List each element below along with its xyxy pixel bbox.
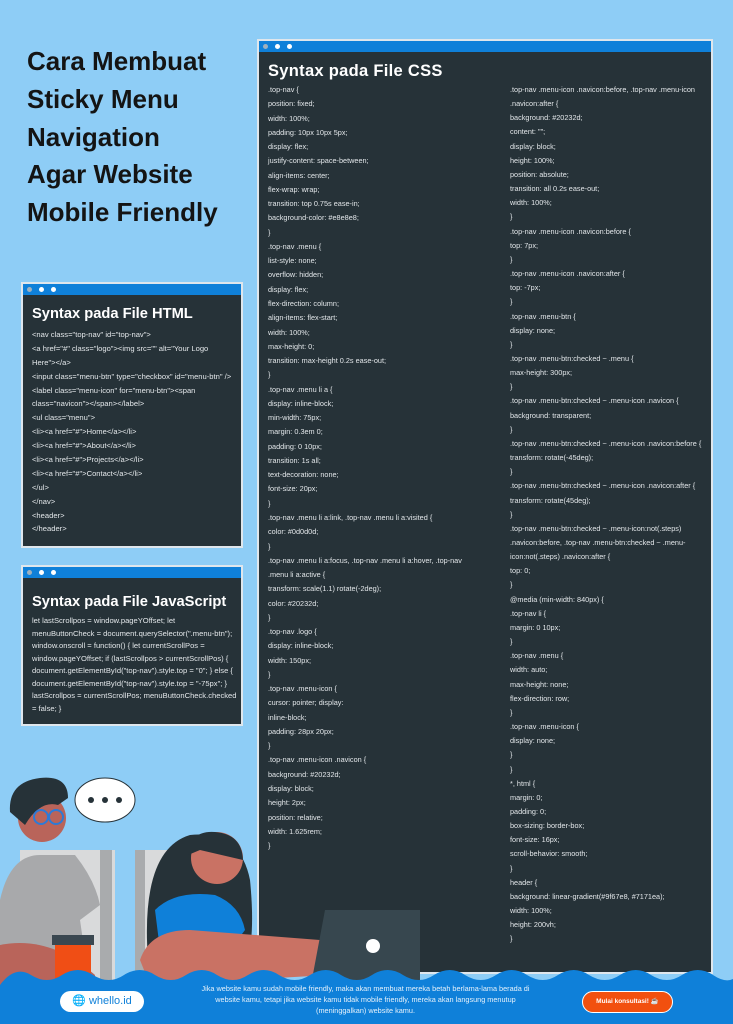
code: JavaScript: window.pageYOffset; if (lastScrollpos > currentScrollPos) {	[32, 654, 228, 662]
code: CSS right column: .navicon:before, .top-nav .menu-btn:checked ~ .menu-	[510, 538, 685, 547]
code: CSS right column: top: 7px;	[510, 241, 538, 250]
code: JavaScript: = false; }	[32, 704, 61, 712]
footer band	[0, 970, 733, 1024]
code: CSS right column: }	[510, 212, 512, 221]
panel: JavaScript	[21, 565, 243, 726]
code: CSS left column: transition: top 0.75s ease-in;	[268, 199, 360, 208]
cup	[52, 935, 94, 945]
code: CSS right column: icon:not(.steps) .navicon:after {	[510, 552, 610, 561]
code: CSS right column: .top-nav li {	[510, 609, 546, 618]
code: CSS left column: display: block;	[268, 784, 314, 793]
code: JavaScript	[32, 616, 236, 712]
code: CSS left column: display: inline-block;	[268, 399, 333, 408]
code: CSS left column: }	[268, 370, 270, 379]
code: CSS left column: align-items: center;	[268, 171, 330, 180]
code: CSS left column: max-height: 0;	[268, 342, 314, 351]
code: CSS left column: .top-nav .menu {	[268, 242, 321, 251]
code: CSS right column: margin: 0 10px;	[510, 623, 560, 632]
code: CSS left column: width: 100%;	[268, 328, 310, 337]
code: CSS right column: }	[510, 382, 512, 391]
title	[27, 46, 218, 227]
code: CSS left column: .top-nav .menu li a {	[268, 385, 332, 394]
code: CSS left column: display: flex;	[268, 285, 308, 294]
code: CSS left column: background-color: #e8e8e8;	[268, 213, 359, 222]
code: CSS right column: padding: 0;	[510, 807, 546, 816]
code: JavaScript: let lastScrollpos = window.pageYOffset; let	[32, 616, 175, 625]
code: CSS right column: .top-nav .menu-btn:checked ~ .menu-icon .navicon {	[510, 396, 679, 405]
code: CSS right column: }	[510, 467, 512, 476]
code: CSS right column: font-size: 16px;	[510, 835, 559, 844]
code: CSS right column: width: 100%;	[510, 198, 552, 207]
code: CSS left column: min-width: 75px;	[268, 413, 321, 422]
woman	[147, 835, 252, 960]
code: CSS left column: cursor: pointer; display:	[268, 698, 343, 707]
code: CSS right column: top: 0;	[510, 566, 530, 575]
man	[0, 855, 100, 990]
code: CSS left column: list-style: none;	[268, 256, 317, 265]
code: CSS right column	[510, 85, 702, 943]
code: CSS right column: height: 200vh;	[510, 920, 556, 929]
code: CSS left column: padding: 28px 20px;	[268, 727, 334, 736]
code: CSS left column: .top-nav .menu-icon .navicon {	[268, 755, 366, 764]
title: Sticky Menu	[27, 84, 179, 114]
code: HTML: <nav class="top-nav" id="top-nav">	[32, 330, 151, 339]
code: CSS right column: display: none;	[510, 736, 555, 745]
button: Mulai konsultasi: Mulai konsultasi! ☕	[596, 998, 659, 1005]
code: HTML: <ul class="menu">	[32, 413, 95, 422]
code: CSS left column: padding: 10px 10px 5px;	[268, 128, 348, 137]
code: CSS right column: .top-nav .menu-btn {	[510, 312, 576, 320]
code: CSS right column: max-height: 300px;	[510, 368, 572, 377]
title: Cara Membuat	[27, 46, 206, 76]
code: CSS right column: }	[510, 580, 512, 589]
code: CSS left column: background: #20232d;	[268, 770, 341, 779]
code: HTML: <li><a href="#">Home</a></li>	[32, 427, 136, 436]
code: CSS left column: width: 1.625rem;	[268, 827, 322, 836]
code: JavaScript: document.getElementById("top-nav").style.top = "-75px"; }	[32, 678, 227, 688]
code: CSS right column: header {	[510, 878, 537, 887]
code: HTML: <li><a href="#">Projects</a></li>	[32, 455, 144, 464]
code: CSS left column: padding: 0 10px;	[268, 442, 322, 451]
code: CSS left column: transition: 1s all;	[268, 456, 321, 465]
code: CSS left column: color: #20232d;	[268, 599, 318, 608]
code: CSS right column: }	[510, 255, 512, 264]
code: CSS left column: }	[268, 613, 270, 622]
code: CSS right column: @media (min-width: 840px) {	[510, 595, 604, 604]
code: CSS left column: overflow: hidden;	[268, 270, 323, 279]
button: Mulai konsultasi	[582, 991, 673, 1013]
speech bubble	[75, 778, 135, 822]
title: Mobile Friendly	[27, 197, 218, 227]
code: CSS right column: }	[510, 425, 512, 434]
code: CSS left column: display: flex;	[268, 142, 308, 151]
code: CSS left column: display: inline-block;	[268, 641, 333, 650]
code: CSS right column: }	[510, 340, 512, 349]
title: Navigation	[27, 122, 160, 152]
code: CSS left column: height: 2px;	[268, 798, 306, 807]
code: JavaScript: menuButtonCheck = document.querySelector(".menu-btn");	[32, 628, 232, 638]
code: CSS left column: text-decoration: none;	[268, 470, 339, 479]
code: CSS right column: }	[510, 934, 512, 943]
code: CSS left column: position: relative;	[268, 813, 323, 822]
code: CSS left column: .top-nav .logo {	[268, 627, 317, 636]
code: CSS right column: .top-nav .menu-btn:checked ~ .menu-icon:not(.steps)	[510, 524, 681, 533]
illustration: two people at laptops	[0, 778, 420, 985]
code: CSS left column: width: 150px;	[268, 656, 311, 665]
code: CSS right column: display: none;	[510, 326, 555, 335]
code: HTML: class="navicon"></span></label>	[32, 399, 144, 408]
code: CSS right column: .navicon:after {	[510, 99, 558, 108]
code: CSS left column: font-size: 20px;	[268, 484, 317, 493]
code: CSS left column: .menu li a:active {	[268, 570, 325, 579]
code: CSS right column: .top-nav .menu-icon .navicon:after {	[510, 269, 625, 278]
heading: HTML: Syntax pada File HTML	[32, 306, 193, 322]
chairs	[20, 850, 115, 980]
code: CSS left column: }	[268, 499, 270, 508]
code: CSS right column: width: 100%;	[510, 906, 552, 915]
laptop	[310, 910, 420, 990]
code: CSS left column: }	[268, 741, 270, 750]
code: CSS left column: position: fixed;	[268, 99, 315, 108]
code: HTML: </ul>	[32, 483, 49, 492]
code: JavaScript: lastScrollpos = currentScrollPos; menuButtonCheck.checked	[32, 691, 236, 700]
code: CSS left column: transform: scale(1.1) rotate(-2deg);	[268, 584, 381, 593]
code: CSS right column: box-sizing: border-box;	[510, 821, 584, 830]
code: CSS right column: transform: rotate(45deg);	[510, 496, 591, 505]
code: CSS left column: .top-nav .menu-icon {	[268, 684, 337, 693]
code: CSS right column: }	[510, 864, 512, 873]
panel: CSS	[257, 39, 713, 974]
code: CSS right column: transform: rotate(-45deg);	[510, 453, 593, 462]
code: CSS left column: width: 100%;	[268, 114, 310, 123]
code: CSS right column: }	[510, 510, 512, 519]
code: CSS right column: width: auto;	[510, 665, 547, 674]
code: CSS right column: .top-nav .menu {	[510, 651, 563, 660]
code: CSS right column: }	[510, 708, 512, 717]
code: HTML: </header>	[32, 524, 67, 533]
code: HTML: <li><a href="#">About</a></li>	[32, 441, 136, 450]
code: CSS right column: }	[510, 764, 512, 774]
code: CSS left column: justify-content: space-between;	[268, 156, 369, 165]
code: CSS right column: background: #20232d;	[510, 113, 583, 122]
code: CSS right column: }	[510, 750, 512, 759]
code: HTML: </nav>	[32, 497, 55, 506]
code: HTML: <header>	[32, 511, 65, 520]
code: CSS right column: top: -7px;	[510, 283, 540, 292]
code: CSS left column: margin: 0.3em 0;	[268, 427, 323, 436]
code: CSS right column: .top-nav .menu-icon {	[510, 722, 579, 731]
code: CSS right column: }	[510, 637, 512, 646]
logo button: whello.id	[60, 991, 144, 1012]
code: CSS right column: .top-nav .menu-icon .navicon:before {	[510, 227, 631, 236]
code: CSS right column: background: linear-gradient(#9f67e8, #7171ea);	[510, 892, 665, 901]
code: CSS right column: *, html {	[510, 779, 535, 788]
code: HTML: Here"></a>	[32, 358, 71, 367]
code: CSS left column: align-items: flex-start;	[268, 313, 337, 322]
code: CSS right column: content: "";	[510, 127, 545, 136]
code: CSS right column: background: transparent;	[510, 411, 591, 420]
code: CSS right column: flex-direction: row;	[510, 694, 569, 703]
code: CSS right column: transition: all 0.2s ease-out;	[510, 184, 599, 193]
code: CSS right column: height: 100%;	[510, 156, 555, 165]
code: CSS left column: inline-block;	[268, 713, 307, 722]
code: HTML: <a href="#" class="logo"><img src="" alt="Your Logo	[32, 344, 208, 353]
code: CSS left column: }	[268, 841, 270, 850]
code: HTML	[32, 330, 231, 533]
code: CSS right column: display: block;	[510, 142, 556, 151]
code: CSS left column: }	[268, 542, 270, 550]
code: CSS left column: flex-wrap: wrap;	[268, 185, 320, 194]
code: JavaScript: document.getElementById("top-nav").style.top = "0"; } else {	[32, 666, 233, 675]
code: CSS right column: .top-nav .menu-btn:checked ~ .menu-icon .navicon:after {	[510, 481, 695, 490]
code: CSS right column: }	[510, 297, 512, 306]
code: HTML: <li><a href="#">Contact</a></li>	[32, 469, 142, 478]
title: Agar Website	[27, 159, 193, 189]
heading: JavaScript: Syntax pada File JavaScript	[32, 594, 226, 610]
code: HTML: <label class="menu-icon" for="menu-btn"><span	[32, 386, 195, 395]
code: CSS left column: .top-nav {	[268, 85, 299, 94]
code: CSS left column: flex-direction: column;	[268, 299, 339, 308]
logo button: whello.id: 🌐 whello.id	[72, 995, 132, 1007]
code: CSS left column: }	[268, 228, 270, 237]
code: CSS left column: .top-nav .menu li a:link, .top-nav .menu li a:visited {	[268, 513, 432, 522]
code: CSS right column: .top-nav .menu-icon .navicon:before, .top-nav .menu-icon	[510, 85, 695, 94]
code: HTML: <input class="menu-btn" type="checkbox" id="menu-btn" />	[32, 372, 231, 381]
heading: CSS: Syntax pada File CSS	[268, 62, 443, 80]
code: CSS right column: scroll-behavior: smooth;	[510, 849, 587, 858]
footer text: Jika website kamu sudah mobile friendly, maka akan membuat mereka betah berlama-lama berada di website kamu, tetapi jika website kamu tidak mobile friendly, mereka akan langsung menutup (meninggalkan) website kamu.	[202, 984, 529, 1015]
code: CSS right column: max-height: none;	[510, 680, 568, 689]
code: CSS right column: .top-nav .menu-btn:checked ~ .menu {	[510, 354, 634, 363]
code: JavaScript: window.onscroll = function() { let currentScrollPos =	[32, 641, 205, 650]
code: CSS left column: .top-nav .menu li a:focus, .top-nav .menu li a:hover, .top-nav	[268, 556, 462, 565]
code: CSS left column: transition: max-height 0.2s ease-out;	[268, 356, 386, 365]
code: CSS left column	[268, 85, 462, 850]
code: CSS right column: .top-nav .menu-btn:checked ~ .menu-icon .navicon:before {	[510, 439, 701, 448]
panel: HTML	[21, 282, 243, 548]
code: CSS right column: margin: 0;	[510, 793, 542, 802]
code: CSS left column: color: #0d0d0d;	[268, 527, 318, 536]
code: CSS right column: position: absolute;	[510, 170, 569, 179]
code: CSS left column: }	[268, 670, 270, 679]
